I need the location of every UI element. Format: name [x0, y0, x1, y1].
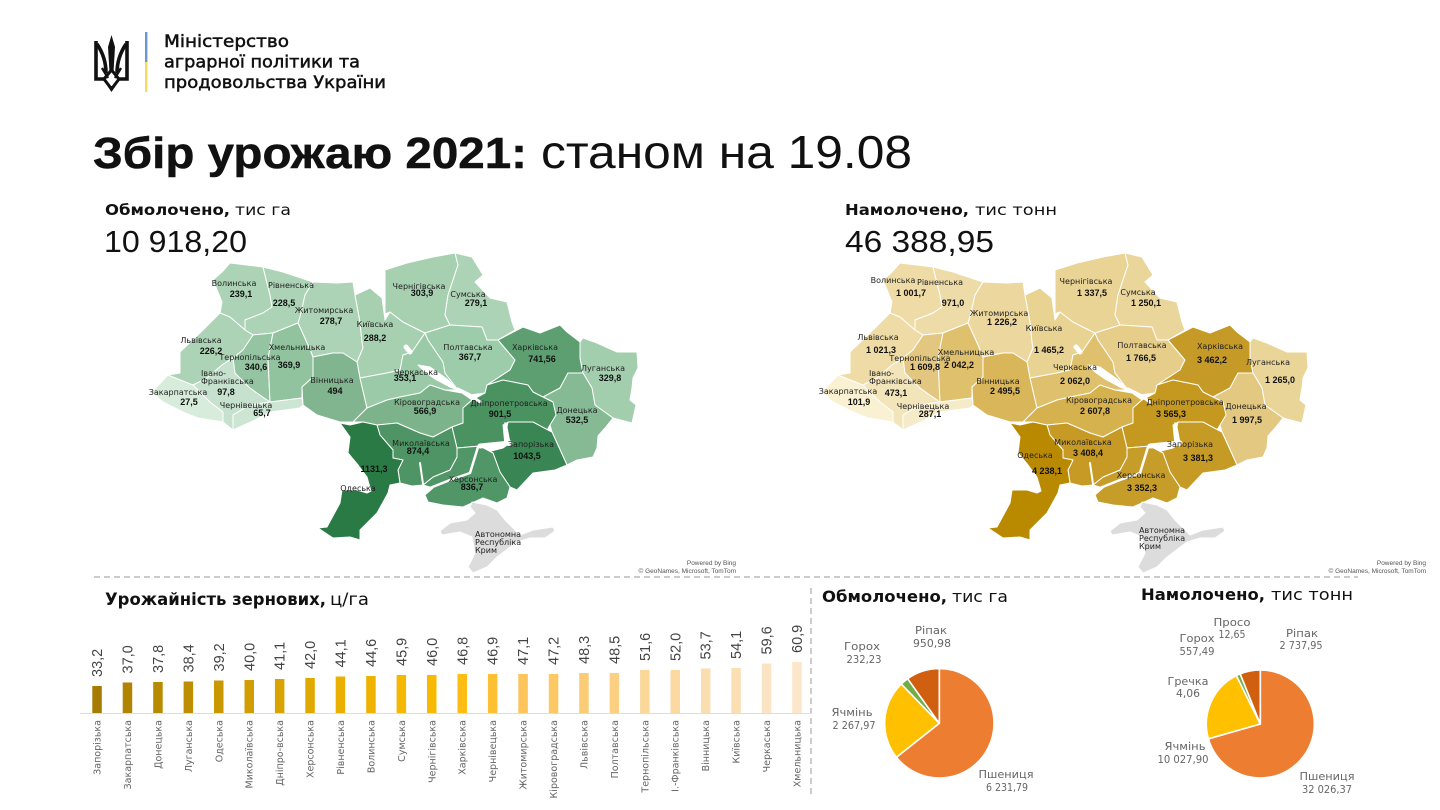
- bar chart: grain yield by region: Донецька: [153, 720, 164, 769]
- bar chart: grain yield by region: Дніпро-вська: [275, 720, 286, 786]
- region labels: Черкаська: [394, 368, 438, 377]
- pie labels: 2 267,97: [832, 719, 876, 732]
- ministry name: аграрної політики та: [164, 52, 360, 72]
- pie chart: crop area: [832, 624, 1034, 794]
- region labels: Франківська: [201, 377, 254, 386]
- region labels: 494: [327, 386, 343, 396]
- region labels: 329,8: [599, 373, 621, 383]
- region labels: Луганська: [1246, 358, 1290, 367]
- bar chart: grain yield by region: Львівська: [579, 720, 590, 769]
- region labels: Донецька: [1225, 402, 1267, 411]
- region labels: 65,7: [253, 408, 271, 418]
- region labels: Автономна: [475, 530, 521, 539]
- region labels: 1 250,1: [1131, 298, 1161, 308]
- region labels: Закарпатська: [819, 387, 877, 396]
- region labels: 874,4: [407, 446, 429, 456]
- region labels: Харківська: [512, 343, 558, 352]
- bar chart: grain yield by region: 52,0: [668, 633, 684, 661]
- region labels: 566,9: [414, 406, 436, 416]
- region labels: Миколаївська: [392, 439, 450, 448]
- region labels: Крим: [1139, 542, 1161, 551]
- region labels: Київська: [357, 320, 393, 329]
- bar chart: grain yield by region: 41,1: [273, 642, 289, 670]
- pie labels: Ріпак: [915, 624, 947, 637]
- region labels: 226,2: [200, 346, 222, 356]
- region labels: Львівська: [180, 336, 222, 345]
- region labels: Дніпропетровська: [470, 399, 548, 408]
- region labels: 288,2: [364, 333, 386, 343]
- pie labels: Горох: [1180, 632, 1215, 645]
- region labels: Чернівецька: [897, 402, 949, 411]
- region labels: Волинська: [871, 276, 915, 285]
- bar chart: grain yield by region: 46,0: [425, 638, 441, 666]
- region labels: Херсонська: [1117, 471, 1166, 480]
- pie labels: Ячмінь: [832, 706, 872, 719]
- region labels: 2 607,8: [1080, 406, 1110, 416]
- region labels: 1 997,5: [1232, 415, 1262, 425]
- pie labels: 10 027,90: [1158, 753, 1208, 766]
- heading: crop area: Обмолочено,: [822, 587, 947, 606]
- bar chart: grain yield by region: 40,0: [242, 643, 258, 671]
- region labels: 532,5: [566, 415, 588, 425]
- pie labels: Пшениця: [978, 768, 1034, 781]
- region labels: Полтавська: [1117, 341, 1167, 350]
- pie labels: 32 026,37: [1302, 783, 1352, 796]
- region labels: Вінницька: [976, 377, 1020, 386]
- bar chart: grain yield by region: 60,9: [790, 625, 806, 653]
- bar chart: grain yield by region: 47,1: [516, 637, 532, 665]
- region labels: [149, 279, 625, 555]
- heading: threshed area: 10 918,20: [104, 224, 247, 259]
- bar chart: grain yield by region: Сумська: [397, 720, 408, 762]
- ministry name: продовольства України: [164, 73, 386, 93]
- region labels: Київська: [1026, 324, 1062, 333]
- bar chart: grain yield by region: Закарпатська: [123, 720, 134, 789]
- bar chart: grain yield by region: 33,2: [90, 649, 106, 677]
- region labels: Кіровоградська: [394, 398, 460, 407]
- region labels: 1 337,5: [1077, 288, 1107, 298]
- bar chart: grain yield by region: Хмельницька: [792, 720, 803, 787]
- region labels: Тернопільська: [218, 353, 281, 362]
- pie labels: 12,65: [1218, 628, 1246, 641]
- bar chart: grain yield by region: 47,2: [547, 637, 563, 665]
- region labels: Житомирська: [970, 309, 1028, 318]
- region labels: 3 408,4: [1073, 448, 1103, 458]
- region labels: 353,1: [394, 373, 416, 383]
- pie labels: [1158, 616, 1354, 796]
- pie labels: 4,06: [1176, 687, 1200, 700]
- map credit: Powered by Bing: [1377, 560, 1426, 567]
- region labels: 473,1: [885, 388, 907, 398]
- region labels: 1 766,5: [1126, 353, 1156, 363]
- region labels: 741,56: [528, 354, 556, 364]
- pie labels: 557,49: [1180, 645, 1214, 658]
- heading: threshed tonnes: Намолочено,: [845, 201, 969, 219]
- bar chart: grain yield by region: 48,3: [577, 636, 593, 664]
- region labels: Чернігівська: [1060, 277, 1113, 286]
- region labels: 340,6: [245, 362, 267, 372]
- region labels: Одеська: [1017, 451, 1053, 460]
- region labels: Хмельницька: [269, 343, 325, 352]
- pie labels: 6 231,79: [986, 781, 1028, 794]
- pie labels: Ріпак: [1286, 627, 1318, 640]
- region labels: 2 042,2: [944, 360, 974, 370]
- region labels: Запорізька: [508, 440, 554, 449]
- bar chart: grain yield by region: 38,4: [181, 644, 197, 672]
- region labels: [819, 276, 1295, 551]
- bar chart: grain yield by region: 51,6: [638, 633, 654, 661]
- heading: crop area: тис га: [952, 587, 1008, 606]
- region labels: Херсонська: [449, 475, 498, 484]
- region labels: 3 381,3: [1183, 453, 1213, 463]
- bar chart: grain yield by region: [80, 625, 812, 798]
- region labels: Харківська: [1197, 342, 1243, 351]
- bar chart: grain yield by region: Херсонська: [306, 720, 317, 778]
- bar chart: grain yield by region: Житомирська: [519, 720, 530, 790]
- region labels: 278,7: [320, 316, 342, 326]
- region labels: 2 062,0: [1060, 376, 1090, 386]
- bar chart: grain yield by region: Кіровоградська: [549, 720, 560, 798]
- region labels: 1 609,8: [910, 362, 940, 372]
- map credit: Powered by Bing: [687, 560, 736, 567]
- bar chart: grain yield by region: Волинська: [366, 720, 377, 773]
- heading: grain yield: Урожайність зернових,: [105, 590, 326, 610]
- region labels: Житомирська: [295, 306, 353, 315]
- region labels: 1 021,3: [866, 345, 896, 355]
- bar chart: grain yield by region: Запорізька: [92, 720, 104, 775]
- title: станом на 19.08: [541, 126, 912, 178]
- pie labels: Горох: [844, 640, 881, 653]
- pie chart: crop tonnes: [1158, 616, 1354, 796]
- pie labels: Пшениця: [1300, 770, 1354, 783]
- region labels: Кіровоградська: [1066, 396, 1132, 405]
- bar chart: grain yield by region: 44,1: [334, 639, 350, 668]
- region labels: 1 265,0: [1265, 375, 1295, 385]
- region labels: Миколаївська: [1054, 438, 1112, 447]
- region labels: 239,1: [230, 289, 252, 299]
- bar chart: grain yield by region: Київська: [732, 720, 743, 764]
- bar chart: grain yield by region: 54,1: [729, 631, 745, 659]
- region labels: Полтавська: [443, 343, 493, 352]
- region labels: Луганська: [581, 364, 625, 373]
- region labels: 3 565,3: [1156, 409, 1186, 419]
- bar chart: grain yield by region: 37,0: [120, 645, 136, 674]
- region labels: 901,5: [489, 409, 511, 419]
- bar chart: grain yield by region: Черкаська: [762, 720, 773, 772]
- bar chart: grain yield by region: Чернігівська: [427, 720, 438, 783]
- region labels: 3 352,3: [1127, 483, 1157, 493]
- pie labels: Просо: [1214, 616, 1251, 629]
- region labels: Закарпатська: [149, 388, 207, 397]
- bar chart: grain yield by region: Рівненська: [336, 720, 347, 775]
- heading: threshed area: тис га: [235, 201, 291, 219]
- region labels: Дніпропетровська: [1146, 398, 1224, 407]
- region labels: 836,7: [461, 482, 483, 492]
- region labels: Республіка: [1139, 534, 1185, 543]
- bar chart: grain yield by region: Чернівецька: [488, 720, 499, 782]
- region labels: 3 462,2: [1197, 355, 1227, 365]
- pie labels: Ячмінь: [1164, 740, 1206, 753]
- map: threshed area by region: [149, 253, 736, 575]
- bar chart: grain yield by region: Луганська: [184, 720, 195, 772]
- map credit: © GeoNames, Microsoft, TomTom: [638, 567, 736, 575]
- region labels: Рівненська: [917, 278, 963, 287]
- region labels: Запорізька: [1167, 440, 1213, 449]
- region labels: Республіка: [475, 538, 521, 547]
- pie labels: 2 737,95: [1280, 639, 1323, 652]
- bar chart: grain yield by region: І.-Франківська: [671, 720, 682, 792]
- region labels: 228,5: [273, 298, 295, 308]
- region labels: 369,9: [278, 360, 300, 370]
- region labels: Івано-: [201, 369, 226, 378]
- bar chart: grain yield by region: Полтавська: [610, 720, 621, 778]
- map: threshed tonnes by region: [819, 253, 1426, 575]
- bar chart: grain yield by region: Вінницька: [701, 720, 712, 771]
- pie labels: 232,23: [846, 653, 882, 666]
- region labels: 1 001,7: [896, 288, 926, 298]
- bar chart: grain yield by region: Тернопільська: [640, 720, 651, 794]
- region labels: Сумська: [1120, 288, 1156, 297]
- ministry name: Міністерство: [164, 32, 289, 52]
- bar chart: grain yield by region: 53,7: [699, 631, 715, 660]
- region labels: 971,0: [942, 298, 964, 308]
- bar chart: grain yield by region: Одеська: [214, 720, 225, 762]
- region labels: Івано-: [869, 369, 894, 378]
- region labels: Франківська: [869, 377, 922, 386]
- pie labels: Гречка: [1168, 675, 1208, 688]
- bar chart: grain yield by region: 44,6: [364, 639, 380, 667]
- heading: threshed area: Обмолочено,: [105, 201, 230, 219]
- region labels: 4 238,1: [1032, 466, 1062, 476]
- region labels: 27,5: [180, 397, 198, 407]
- rivers and reservoirs: [418, 365, 458, 390]
- region labels: Донецька: [556, 406, 598, 415]
- bar chart: grain yield by region: 42,0: [303, 641, 319, 669]
- bar chart: grain yield by region: 46,9: [486, 637, 502, 665]
- region labels: 97,8: [217, 387, 235, 397]
- region labels: Черкаська: [1053, 363, 1097, 372]
- bar chart: grain yield by region: Миколаївська: [245, 720, 256, 788]
- heading: crop tonnes: тис тонн: [1271, 585, 1353, 604]
- region labels: 1131,3: [360, 464, 388, 474]
- heading: threshed tonnes: [845, 201, 1057, 259]
- region labels: Крим: [475, 546, 497, 555]
- region labels: 1043,5: [513, 451, 541, 461]
- heading: threshed tonnes: тис тонн: [975, 201, 1057, 219]
- map credit: © GeoNames, Microsoft, TomTom: [1328, 567, 1426, 575]
- heading: threshed tonnes: 46 388,95: [845, 224, 994, 259]
- heading: grain yield: ц/га: [330, 590, 369, 610]
- region labels: 303,9: [411, 288, 433, 298]
- bar chart: grain yield by region: Харківська: [458, 720, 469, 775]
- heading: threshed area: [104, 201, 291, 259]
- ministry logo: [96, 32, 386, 93]
- region labels: Сумська: [450, 290, 486, 299]
- pie labels: 950,98: [913, 637, 951, 650]
- bar chart: grain yield by region: 45,9: [394, 638, 410, 666]
- region labels: Хмельницька: [938, 348, 994, 357]
- region labels: Одеська: [340, 484, 376, 493]
- bar chart: grain yield by region: 48,5: [607, 636, 623, 664]
- region labels: 1 465,2: [1034, 345, 1064, 355]
- pie labels: [832, 624, 1034, 794]
- region labels: 1 226,2: [987, 317, 1017, 327]
- bar chart: grain yield by region: 37,8: [151, 645, 167, 673]
- region labels: Вінницька: [310, 376, 354, 385]
- bar chart: grain yield by region: 39,2: [212, 643, 228, 672]
- region labels: 101,9: [848, 397, 870, 407]
- region labels: Автономна: [1139, 526, 1185, 535]
- region labels: 367,7: [459, 352, 481, 362]
- region labels: Чернівецька: [220, 401, 272, 410]
- heading: crop tonnes: Намолочено,: [1141, 585, 1265, 604]
- bar chart: grain yield by region: 46,8: [455, 637, 471, 665]
- region labels: Тернопільська: [888, 354, 951, 363]
- region labels: Львівська: [857, 333, 899, 342]
- region labels: Чернігівська: [393, 282, 446, 291]
- region labels: Рівненська: [268, 281, 314, 290]
- title: Збір урожаю 2021:: [93, 129, 527, 178]
- region labels: 279,1: [465, 298, 487, 308]
- region labels: 2 495,5: [990, 386, 1020, 396]
- bar chart: grain yield by region: 59,6: [760, 626, 776, 654]
- region labels: 287,1: [919, 409, 941, 419]
- icon: trident: [96, 35, 127, 92]
- region labels: Волинська: [212, 279, 256, 288]
